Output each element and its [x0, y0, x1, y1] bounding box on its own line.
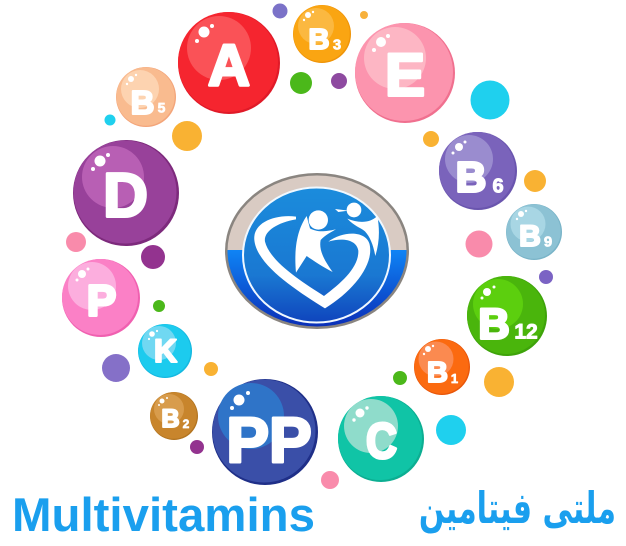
bubble: vitamin P: P: [87, 276, 116, 326]
bubble: vitamin B1: 1: [451, 371, 458, 386]
bubble: vitamin A: A: [208, 34, 250, 98]
bubble: vitamin B5: [116, 67, 176, 127]
bubble: vitamin B9: [506, 204, 562, 260]
bubble: vitamin C: [338, 396, 424, 482]
bubble: vitamin C: C: [366, 413, 397, 469]
bubble: vitamin B6: B: [456, 154, 486, 200]
bubble: vitamin P: [62, 259, 140, 337]
bubble: vitamin D: [73, 140, 179, 246]
title: Multivitamins: Multivitamins: [12, 488, 315, 541]
bubble: vitamin PP: [212, 379, 318, 485]
bubble: vitamin B1: B: [427, 357, 448, 389]
central logo: [225, 170, 409, 330]
bubble: vitamin A: [178, 12, 280, 114]
bubble: vitamin E: [355, 23, 455, 123]
bubble: vitamin E: E: [385, 42, 425, 108]
bubble: vitamin B5: B: [131, 84, 154, 121]
bubble: vitamin B6: 6: [492, 176, 504, 198]
bubble: vitamin B12: [467, 276, 547, 356]
bubble: vitamin B2: 2: [183, 417, 190, 431]
bubble: vitamin B3: [293, 5, 351, 63]
bubble: vitamin B3: 3: [333, 36, 341, 54]
bubble: vitamin PP: PP: [226, 404, 312, 476]
bubble: vitamin B2: B: [161, 405, 180, 433]
bubble: vitamin B2: [150, 392, 198, 440]
bubble: vitamin B5: 5: [158, 100, 166, 116]
bubble: vitamin B9: 9: [544, 234, 552, 250]
bubble: vitamin B9: B: [519, 220, 541, 253]
bubble: vitamin K: K: [154, 333, 177, 369]
bubble: vitamin B3: B: [309, 24, 329, 56]
bubble: vitamin D: D: [103, 162, 148, 230]
bubble: vitamin B1: [414, 339, 470, 395]
logo heart and figures: [254, 203, 379, 308]
decorative coloured dots: [66, 4, 553, 489]
title: Persian: ملتی فیتامین: [419, 482, 616, 533]
bubble: vitamin B12: 12: [514, 320, 538, 344]
bubble: vitamin B12: B: [478, 300, 510, 348]
bubble: vitamin B6: [439, 132, 517, 210]
bubble: vitamin K: [138, 324, 192, 378]
